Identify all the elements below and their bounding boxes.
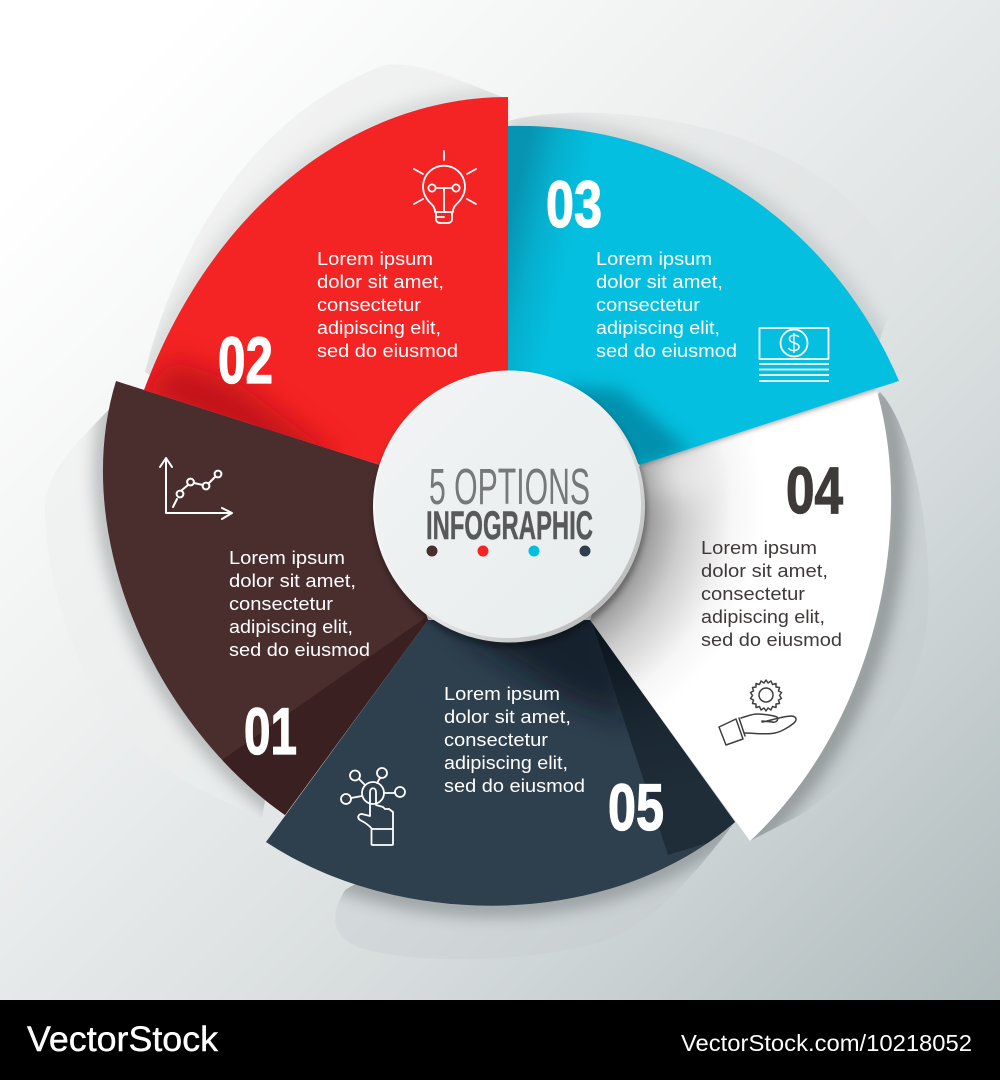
icon: banknote stack bbox=[759, 328, 829, 381]
text block 04: adipiscing elit, bbox=[701, 606, 825, 627]
text block 01 bbox=[229, 547, 370, 660]
text block 05: sed do eiusmod bbox=[444, 775, 585, 796]
text block 01: adipiscing elit, bbox=[229, 616, 353, 637]
number 02: 02 bbox=[218, 323, 273, 397]
footer url: VectorStock.com/10218052 bbox=[681, 1030, 972, 1056]
text block 02: Lorem ipsum bbox=[317, 248, 433, 269]
text block 02: consectetur bbox=[317, 294, 421, 315]
center subtitle: INFOGRAPHIC bbox=[426, 504, 593, 548]
text block 04: Lorem ipsum bbox=[701, 537, 817, 558]
segment 01: brown bbox=[103, 381, 440, 830]
icon: hand with gear bbox=[719, 680, 796, 745]
text block 04: dolor sit amet, bbox=[701, 560, 828, 581]
text block 03: Lorem ipsum bbox=[596, 248, 712, 269]
text block 05: Lorem ipsum bbox=[444, 683, 560, 704]
text block 04: consectetur bbox=[701, 583, 805, 604]
text block 01: sed do eiusmod bbox=[229, 639, 370, 660]
center title: 5 OPTIONS bbox=[429, 458, 590, 515]
text block 05: consectetur bbox=[444, 729, 548, 750]
footer logo: VectorStock bbox=[27, 1020, 219, 1059]
icon: hand touching network bbox=[341, 768, 405, 845]
text block 02 bbox=[317, 248, 458, 361]
number 05: 05 bbox=[608, 770, 664, 844]
color dots bbox=[426, 546, 590, 556]
text block 03: dolor sit amet, bbox=[596, 271, 723, 292]
text block 03 bbox=[596, 248, 737, 361]
text block 02: sed do eiusmod bbox=[317, 340, 458, 361]
segment 04: white bbox=[590, 380, 891, 841]
text block 05: dolor sit amet, bbox=[444, 706, 571, 727]
text block 01: dolor sit amet, bbox=[229, 570, 356, 591]
background ghost shapes bbox=[45, 64, 929, 959]
text block 05 bbox=[444, 683, 585, 796]
segment 03: cyan bbox=[508, 126, 899, 470]
text block 02: dolor sit amet, bbox=[317, 271, 444, 292]
text block 03: adipiscing elit, bbox=[596, 317, 720, 338]
icon: line chart bbox=[160, 458, 232, 519]
text block 03: consectetur bbox=[596, 294, 700, 315]
segment 02: red bbox=[140, 97, 508, 470]
text block 02: adipiscing elit, bbox=[317, 317, 441, 338]
text block 04: sed do eiusmod bbox=[701, 629, 842, 650]
text block 04 bbox=[701, 537, 842, 650]
footer band bbox=[0, 1000, 1000, 1080]
segment 05: dark blue bbox=[266, 600, 750, 906]
text block 03: sed do eiusmod bbox=[596, 340, 737, 361]
center circle bbox=[373, 370, 647, 648]
icon: light bulb bbox=[414, 151, 476, 223]
number 01: 01 bbox=[244, 694, 297, 768]
number 04: 04 bbox=[786, 453, 843, 527]
text block 01: Lorem ipsum bbox=[229, 547, 345, 568]
number 03: 03 bbox=[546, 167, 602, 241]
text block 01: consectetur bbox=[229, 593, 333, 614]
text block 05: adipiscing elit, bbox=[444, 752, 568, 773]
